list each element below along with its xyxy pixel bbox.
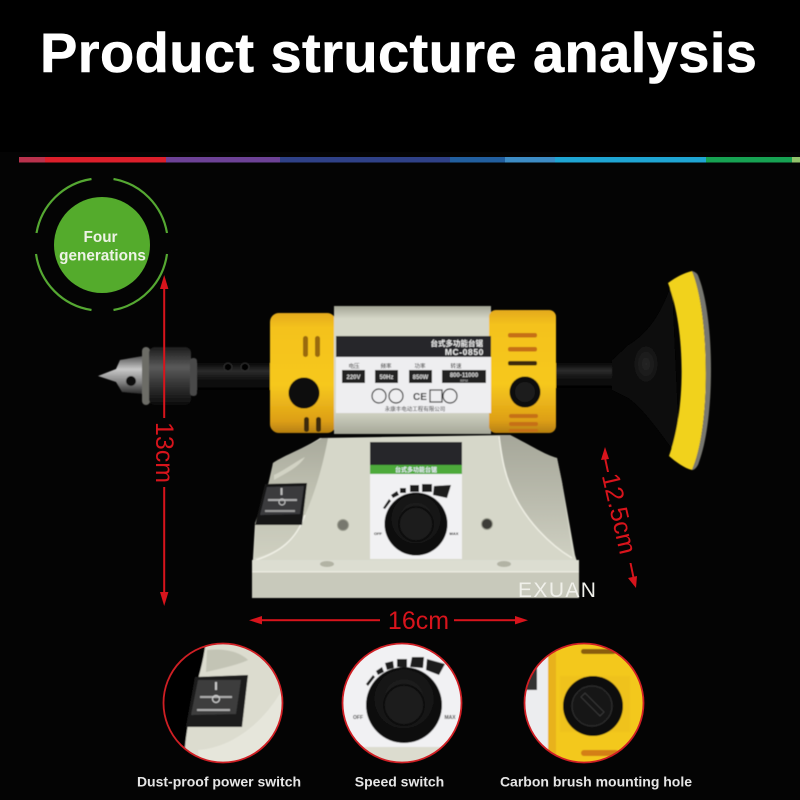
motor spec label: 转速 — [450, 362, 462, 370]
detail: carbon brush hole — [524, 642, 644, 764]
badge green disc — [54, 197, 150, 293]
right motor vents and brush cap — [508, 333, 540, 432]
caption: power switch: Dust-proof power switch — [137, 774, 301, 790]
speed switch photo: MAX — [444, 715, 456, 721]
detail: power switch — [162, 642, 284, 764]
dimension: width 16cm — [249, 607, 528, 635]
speed switch photo — [343, 644, 461, 762]
badge outer ring — [36, 179, 167, 310]
badge: Four generations — [36, 179, 167, 310]
base control panel — [370, 442, 462, 559]
dimension: height 12.5cm — [596, 447, 642, 588]
motor spec label: CE — [413, 392, 427, 403]
power switch ring — [164, 644, 282, 762]
dimension: height 13cm — [150, 275, 178, 606]
rocker power switch — [255, 483, 307, 525]
left motor vents and brush cap — [288, 336, 321, 432]
base control panel: MAX — [450, 531, 459, 536]
power switch photo — [184, 644, 282, 762]
left shaft — [195, 363, 272, 390]
carbon brush photo — [525, 644, 643, 762]
motor spec label: 频率 — [380, 362, 392, 370]
base control panel: OFF — [374, 531, 383, 536]
dimension: height 12.5cm: 12.5cm — [596, 471, 642, 557]
caption: carbon brush hole: Carbon brush mounting hole — [500, 774, 692, 790]
badge text: generations — [59, 248, 146, 264]
motor spec label: RPM — [460, 379, 468, 383]
yellow polishing pad — [668, 271, 711, 470]
product illustration: bench polisher — [98, 271, 711, 598]
watermark: EXUAN: EXUAN — [518, 579, 597, 602]
motor spec label: 永康丰电动工程有限公司 — [385, 405, 445, 413]
dimension: height 13cm: 13cm — [150, 422, 178, 483]
motor spec label: 850W — [413, 375, 429, 381]
base control panel: 台式多功能台锯 — [395, 466, 437, 474]
motor spec label: 电压 — [348, 362, 360, 370]
speed switch photo: OFF — [353, 715, 363, 721]
carbon brush ring — [524, 644, 644, 762]
badge text: Four — [84, 229, 118, 246]
speed switch ring — [342, 644, 462, 762]
speed knob — [384, 492, 448, 556]
motor spec label — [336, 336, 491, 413]
motor spec label: 50Hz — [379, 375, 394, 381]
detail: speed switch — [340, 640, 465, 767]
title: Product structure analysis — [40, 21, 757, 84]
motor spec label: 台式多功能台锯 — [430, 338, 483, 348]
base casting — [252, 435, 579, 598]
motor spec label: 功率 — [414, 362, 426, 370]
motor body — [270, 306, 556, 434]
motor spec label: 800-11000 — [450, 373, 479, 379]
right shaft and backing cone — [556, 282, 680, 460]
motor spec label: 220V — [346, 375, 361, 381]
motor spec label: MC-0850 — [445, 347, 484, 357]
rainbow divider bar — [19, 157, 800, 162]
caption: speed switch: Speed switch — [355, 774, 444, 790]
drill chuck — [98, 347, 249, 405]
dimension: width 16cm: 16cm — [388, 607, 449, 635]
